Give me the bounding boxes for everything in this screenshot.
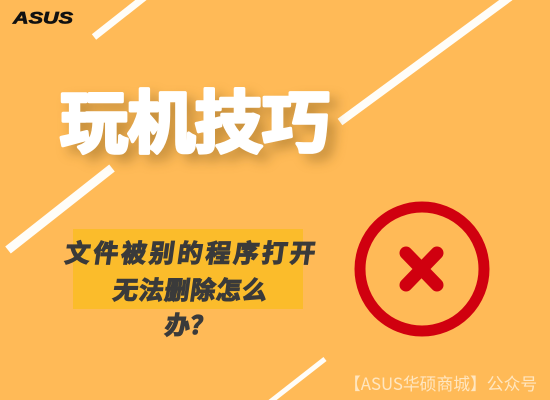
subtitle text: 无法删除怎么 [111,276,269,305]
title with shadow: 玩机技巧 [68,93,338,169]
icon: red cross in circle [360,207,484,331]
diagonal line: top [94,0,146,37]
subtitle text [63,240,317,340]
subtitle text: 办？ [163,312,217,340]
highlight box [73,229,303,309]
footer text: 【ASUS华硕商城】公众号 [344,371,537,395]
logo: ASUS: ASUS [12,8,74,28]
diagonal line: right [340,0,510,122]
diagonal line: bottom [270,359,325,400]
title with shadow: 玩机技巧 [60,86,330,162]
subtitle text: 文件被别的程序打开 [63,240,317,268]
diagonal line: left [8,168,112,250]
